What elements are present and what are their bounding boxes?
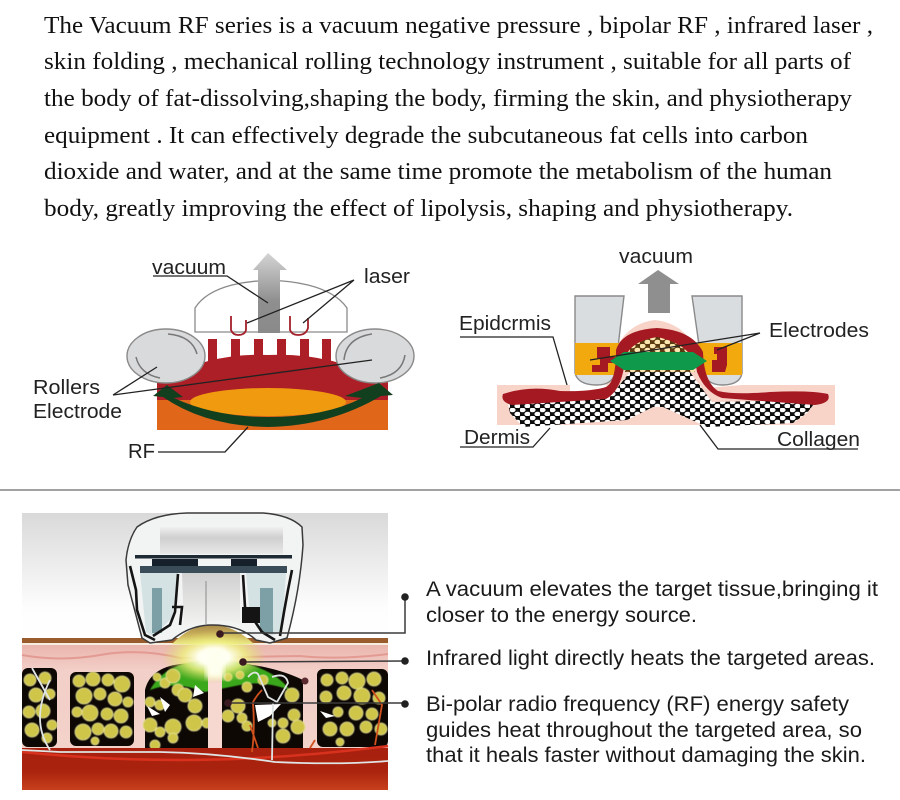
left cup [575, 296, 624, 385]
backdrop [22, 513, 388, 639]
right window [246, 573, 286, 636]
callout text: vacuum: closer to the energy source. [426, 603, 697, 627]
handpiece [126, 513, 303, 643]
vacuum dome [195, 280, 347, 332]
labels: vacuum [619, 246, 693, 268]
callout text: bipolar RF: guides heat throughout the targeted area, so [426, 718, 862, 742]
vessels [250, 690, 382, 752]
green heated zone [150, 660, 290, 692]
right cup [692, 296, 742, 385]
dermis collagen cells [508, 372, 817, 427]
white tissue gaps [92, 685, 335, 722]
callout text: bipolar RF: that it heals faster without damaging the skin. [426, 743, 866, 767]
right roller [336, 329, 414, 383]
intro paragraph: dioxide and water, and at the same time promote the metabolism of the human [44, 158, 832, 185]
intro paragraph: skin folding , mechanical rolling technology instrument , suitable for all parts of [44, 48, 852, 75]
labels: Epidcrmis [459, 313, 551, 335]
electrode pieces [592, 347, 727, 372]
pink skin background [497, 320, 835, 425]
bright septum [208, 662, 222, 748]
fat cells [23, 669, 387, 750]
callout text: bipolar RF: Bi-polar radio frequency (RF) energy safety [426, 692, 849, 716]
labels [33, 257, 410, 463]
surface skin band [22, 638, 388, 643]
pink dermis and septa [22, 644, 388, 750]
intro paragraph: The Vacuum RF series is a vacuum negative pressure , bipolar RF , infrared laser , [44, 12, 873, 39]
diagram: bipolar electrodes [459, 246, 869, 451]
vacuum arrow [638, 270, 679, 313]
yellow gel [575, 343, 742, 375]
leader lines [460, 333, 858, 449]
divider [0, 489, 900, 491]
left window [140, 573, 178, 636]
diagram: rollers and laser handpiece [33, 253, 414, 463]
intro paragraph: the body of fat-dissolving,shaping the body, firming the skin, and physiotherapy [44, 85, 853, 112]
callout text: bipolar RF [426, 692, 866, 767]
callout text: vacuum: A vacuum elevates the target tissue,bringing it [426, 577, 878, 601]
small marker dot [302, 678, 308, 684]
labels: RF [128, 441, 155, 463]
callout text: infrared: Infrared light directly heats the targeted areas. [426, 646, 875, 670]
red epidermis layer [502, 328, 829, 405]
leader lines [113, 276, 372, 452]
labels: Rollers [33, 377, 100, 399]
dark block [242, 607, 260, 623]
black bar [135, 555, 292, 558]
callout text: vacuum [426, 577, 878, 627]
callout connectors [216, 593, 409, 708]
photo: handpiece on skin cross-section [22, 513, 388, 790]
intro paragraph [44, 12, 873, 222]
labels: Electrode [33, 401, 122, 423]
labels: vacuum [152, 257, 226, 279]
RF double arrow [610, 352, 707, 370]
RF arc arrow [153, 383, 393, 427]
left roller [127, 329, 205, 383]
infrared glow [162, 631, 266, 683]
labels [459, 246, 869, 451]
shell [126, 513, 303, 643]
tissue bump [172, 625, 254, 644]
nerve lines [22, 668, 388, 763]
dark frame strokes [130, 566, 292, 640]
top cap shading [160, 527, 283, 554]
intro paragraph: body, greatly improving the effect of lipolysis, shaping and physiotherapy. [44, 195, 793, 222]
labels: Electrodes [769, 320, 869, 342]
vacuum arrow [253, 253, 287, 333]
red mound with comb teeth [157, 339, 388, 400]
labels: Dermis [464, 427, 530, 449]
labels: laser [364, 266, 410, 288]
fat core [190, 388, 346, 416]
laser probes [231, 316, 308, 335]
muscle layer [22, 748, 388, 790]
orange tissue block [157, 382, 388, 430]
window bar [140, 566, 287, 573]
inner chamber [182, 573, 240, 628]
fat chambers [22, 662, 388, 748]
intro paragraph: equipment . It can effectively degrade the subcutaneous fat cells into carbon [44, 122, 808, 149]
cells inside fold [624, 334, 695, 372]
labels: Collagen [777, 429, 860, 451]
